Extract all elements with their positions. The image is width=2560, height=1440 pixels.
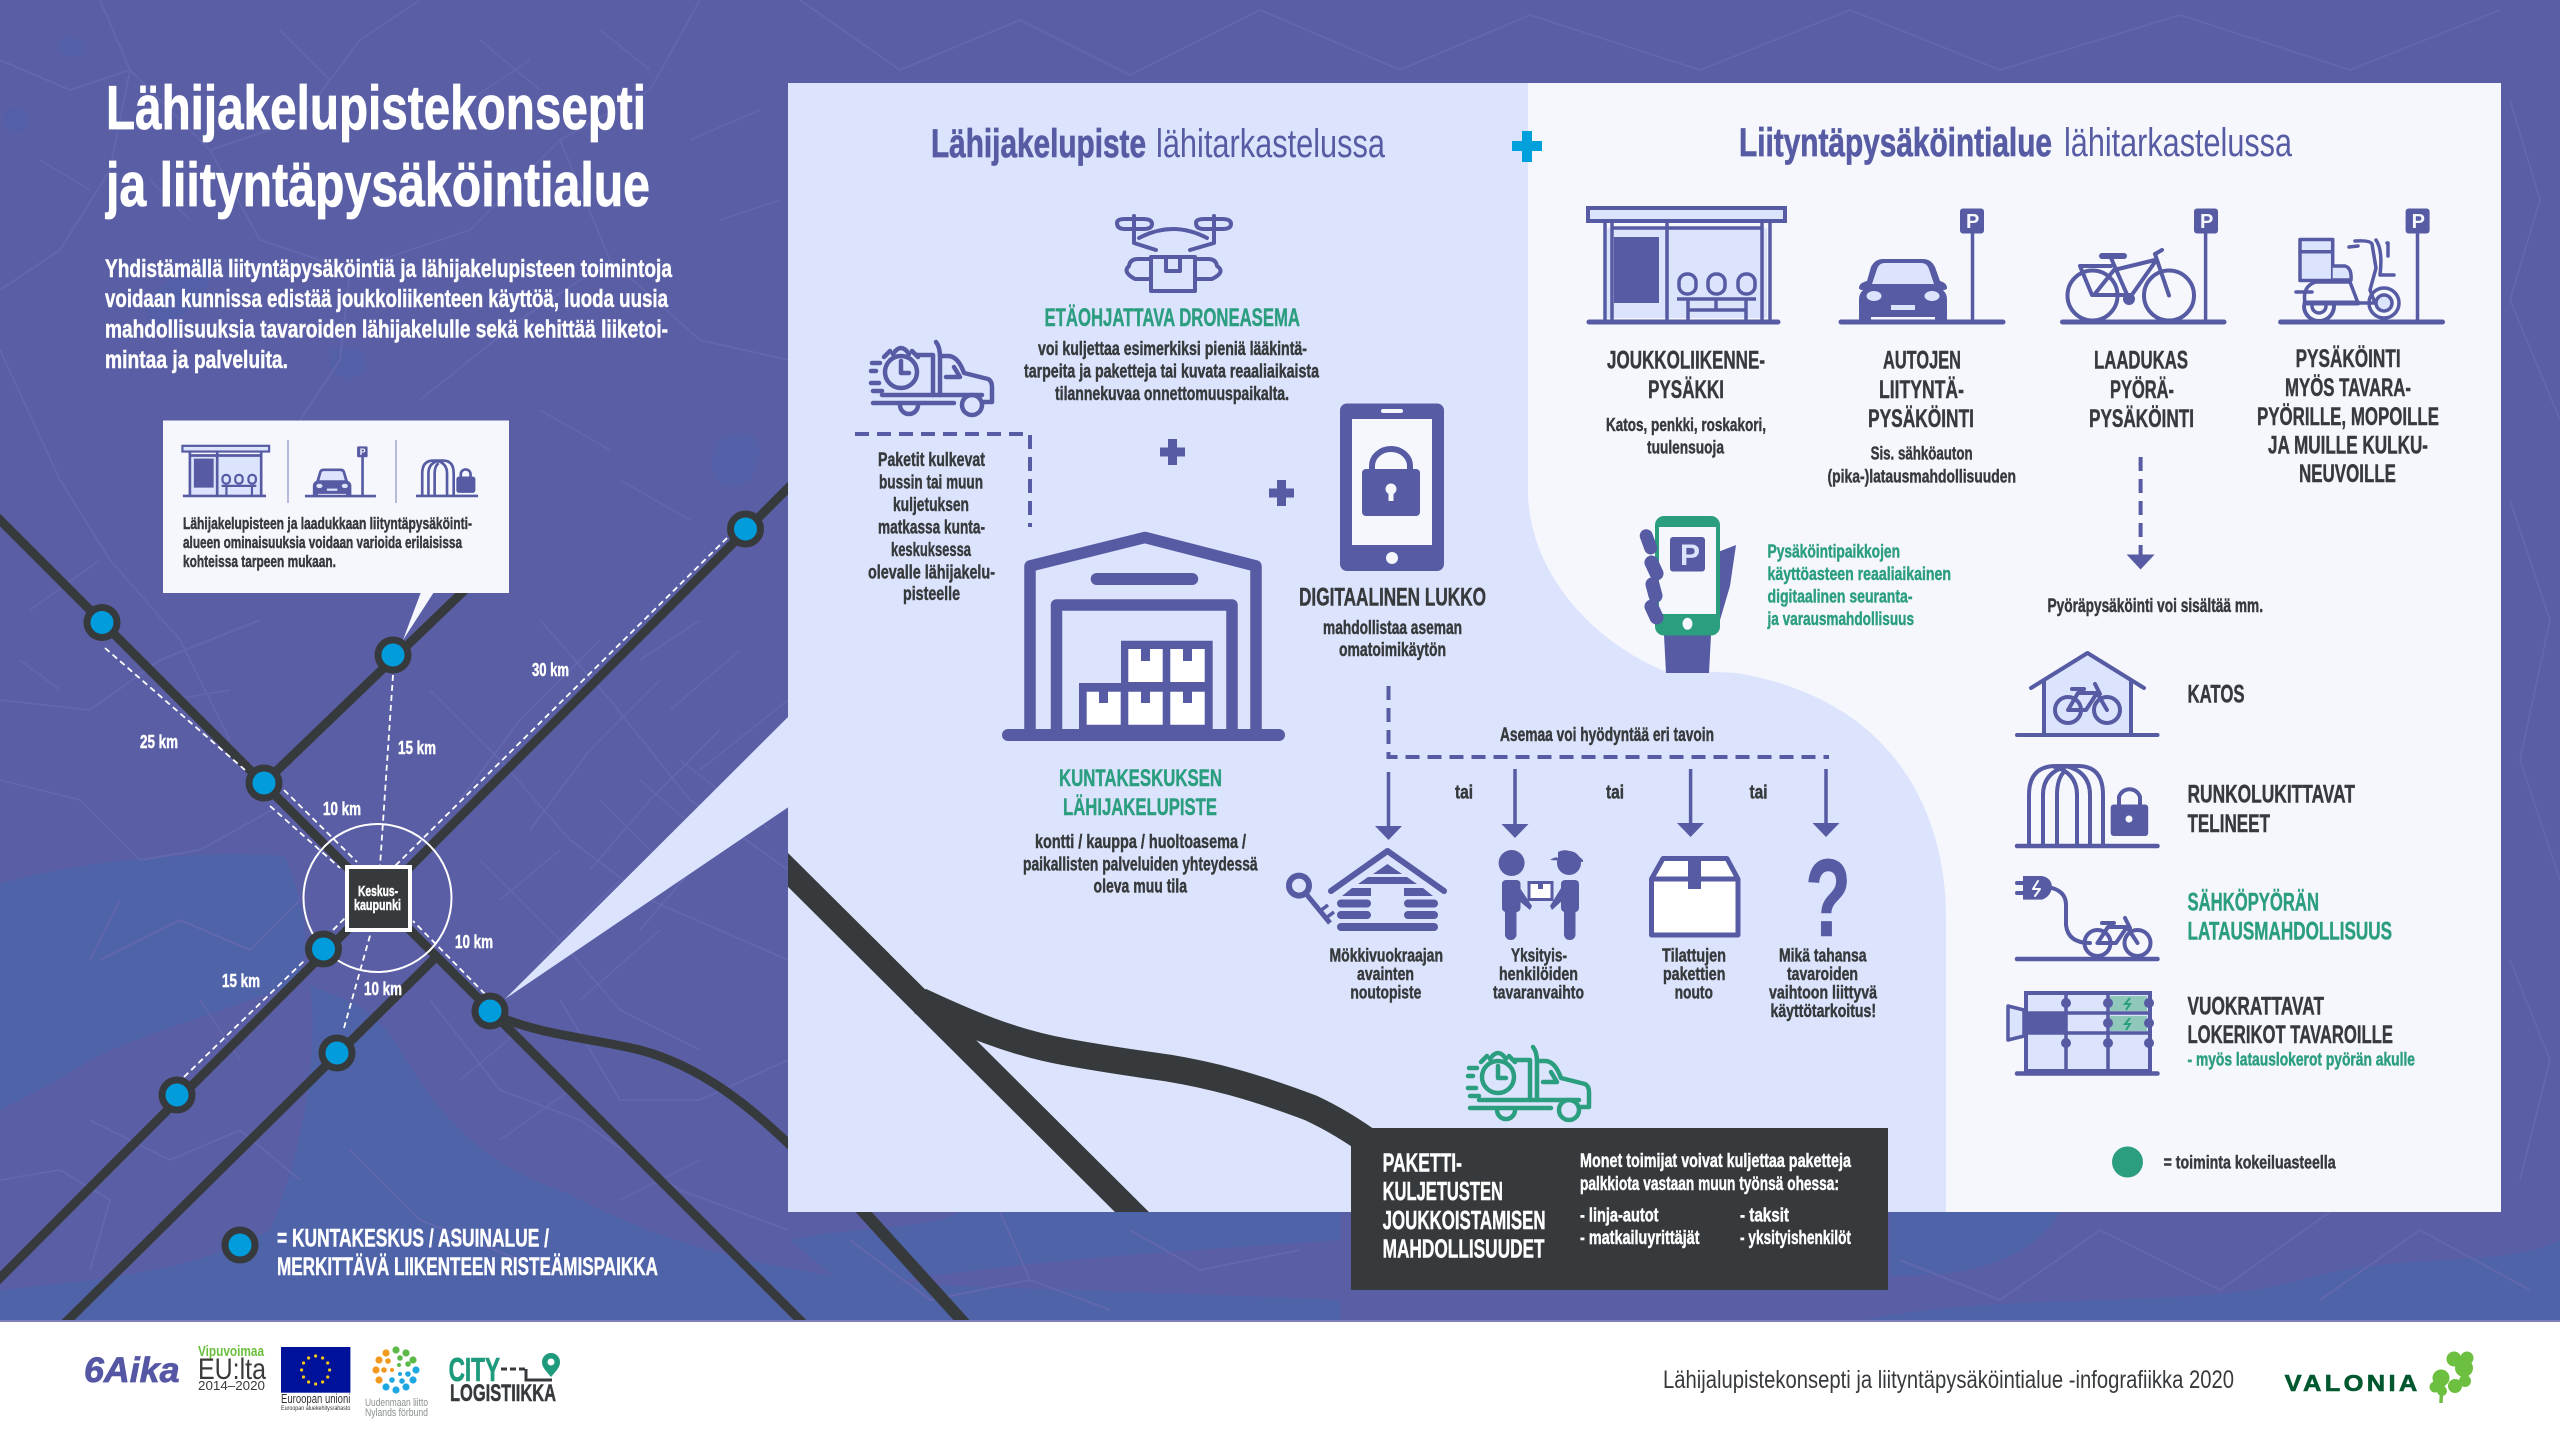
dark box: crowdsourced parcel delivery: - matkailuyrittäjät (1580, 1228, 1700, 1249)
logo: Valonia: VALONIA (2285, 1370, 2421, 1396)
sublabels: parking types (1606, 414, 2016, 486)
logo: Vipuvoimaa EU:lta (198, 1343, 266, 1393)
labels: parking types: PYÖRILLE, MOPOILLE (2257, 402, 2439, 431)
dashed arrow to bike parking options (2127, 457, 2155, 570)
parcel point text: paikallisten palveluiden yhteydessä (1023, 855, 1258, 876)
logo: Vipuvoimaa EU:lta: EU:lta (198, 1353, 266, 1386)
parcel point text: LÄHIJAKELUPISTE (1063, 794, 1217, 821)
icon: delivery truck (871, 342, 992, 415)
icon: drone (1117, 216, 1231, 291)
dashed branch for station uses (1388, 686, 1829, 757)
labels: parking types: PYSÄKÖINTI (2089, 404, 2194, 433)
drone station text: ETÄOHJATTAVA DRONEASEMA (1044, 304, 1300, 332)
distance labels: 10 km (323, 799, 361, 819)
plus between panels (1512, 131, 1542, 162)
distance labels: 15 km (398, 738, 436, 758)
icon: parcel box (1651, 858, 1738, 935)
heading: lähijakelupiste: lähitarkastelussa (1156, 122, 1386, 166)
icon: bicycle and parking sign: P (2200, 211, 2213, 233)
intro paragraph: Yhdistämällä liityntäpysäköintiä ja lähijakelupisteen toimintoja (105, 255, 673, 283)
use case labels: henkilöiden (1499, 963, 1578, 984)
arrows to use cases (1375, 769, 1840, 840)
distance labels: 10 km (455, 932, 493, 952)
callout text: alueen ominaisuuksia voidaan varioida erilaisissa (183, 534, 463, 552)
logo: 6Aika: 6Aika (84, 1351, 180, 1390)
dark box: crowdsourced parcel delivery: PAKETTI- (1383, 1150, 1462, 1178)
logo: Uudenmaan liitto (365, 1346, 428, 1419)
labels: bike parking options: SÄHKÖPYÖRÄN (2188, 888, 2319, 917)
parcel point text: kontti / kauppa / huoltoasema / (1035, 832, 1247, 853)
dashed route to parcel point (855, 434, 1030, 527)
sublabels: parking types: tuulensuoja (1647, 437, 1725, 458)
distance labels: 15 km (222, 971, 260, 991)
callout text (183, 515, 472, 571)
labels: parking types: PYÖRÄ- (2110, 375, 2174, 404)
logo: European Union (281, 1347, 351, 1412)
labels: parking types: NEUVOILLE (2299, 460, 2396, 488)
icon: bike frame lock rack (2017, 766, 2158, 846)
dark box: crowdsourced parcel delivery: KULJETUSTEN (1383, 1178, 1503, 1206)
logo: European Union: Euroopan unioni (281, 1391, 350, 1406)
icon: car and parking sign (1841, 208, 2003, 322)
dark box: crowdsourced parcel delivery (1351, 1128, 1888, 1290)
dark box: crowdsourced parcel delivery: palkkiota vastaan muun työnsä ohessa: (1580, 1174, 1839, 1195)
labels: parking types: AUTOJEN (1883, 347, 1961, 375)
logo: Vipuvoimaa EU:lta: 2014–2020 (198, 1379, 265, 1393)
drone station text (1024, 304, 1319, 405)
title (105, 74, 650, 220)
heading: liityntäpysäköintialue: Liityntäpysäköintialue (1739, 121, 2052, 165)
thick road in detail panel (788, 853, 1372, 1212)
icon: small shelter (182, 446, 269, 496)
callout text: kohteissa tarpeen mukaan. (183, 553, 336, 571)
dark box: crowdsourced parcel delivery: JOUKKOISTAMISEN (1383, 1207, 1546, 1235)
parcel point text (1023, 765, 1258, 898)
dark box: crowdsourced parcel delivery: - taksit (1740, 1206, 1790, 1227)
parcel point text: oleva muu tila (1094, 877, 1187, 898)
drone station text: tarpeita ja paketteja tai kuvata reaaliaikaista (1024, 362, 1319, 382)
parcel point text: KUNTAKESKUKSEN (1059, 765, 1222, 792)
use case labels: tavaroiden (1787, 963, 1858, 984)
icon: two people exchanging a parcel (1499, 850, 1583, 940)
digital lock text: omatoimikäytön (1339, 640, 1446, 661)
icon: bus shelter (1588, 208, 1785, 322)
text: parcels travel on bus: matkassa kunta- (878, 517, 985, 539)
icon: smartphone lock (1340, 404, 1444, 571)
logo: Vipuvoimaa EU:lta: Vipuvoimaa (198, 1343, 265, 1360)
legend: pilot activity: = toiminta kokeiluasteella (2164, 1153, 2336, 1173)
centre city box (347, 867, 410, 930)
route network map with distance labels (0, 476, 966, 1330)
text: real time parking monitoring: Pysäköintipaikkojen (1768, 541, 1900, 562)
icon: green delivery truck (1468, 1047, 1589, 1120)
labels: bike parking options: LATAUSMAHDOLLISUUS (2188, 918, 2392, 946)
labels: bike parking options: - myös latauslokerot pyörän akulle (2188, 1050, 2415, 1070)
icon: bicycle and parking sign (2062, 208, 2224, 322)
icon: cabin and key (1289, 851, 1444, 931)
labels: parking types: JOUKKOLIIKENNE- (1607, 347, 1765, 375)
footer caption: Lähijalupistekonsepti ja liityntäpysäköintialue -infografiikka 2020 (1663, 1366, 2234, 1394)
tai labels: tai (1455, 783, 1473, 804)
icon: small car with parking sign: P (360, 447, 366, 457)
text: real time parking monitoring: ja varausmahdollisuus (1767, 608, 1914, 629)
text: parcels travel on bus: pisteelle (903, 583, 960, 605)
distance labels: 25 km (140, 732, 178, 752)
logo: City-logistiikka: LOGISTIIKKA (450, 1380, 556, 1407)
digital lock text: mahdollistaa aseman (1323, 618, 1462, 639)
dark box: crowdsourced parcel delivery: - yksityishenkilöt (1740, 1228, 1851, 1249)
labels: bike parking options: RUNKOLUKITTAVAT (2188, 780, 2355, 808)
use case labels: vaihtoon liittyvä (1769, 982, 1878, 1003)
logo: Uudenmaan liitto: Uudenmaan liitto (365, 1397, 428, 1409)
centre city box: Keskus- (358, 884, 398, 900)
text: real time parking monitoring: käyttöasteen reaaliaikainen (1768, 563, 1951, 584)
drone station text: tilannekuvaa onnettomuuspaikalta. (1055, 384, 1289, 405)
text: parcels travel on bus: olevalle lähijakelu- (868, 562, 995, 584)
legend: node meaning (225, 1224, 658, 1281)
icon: scooter and parking sign (2281, 208, 2442, 322)
panel: lähijakelupiste detail (770, 83, 1988, 1225)
sublabels: parking types: Katos, penkki, roskakori, (1606, 414, 1766, 435)
labels: parking types: PYSÄKÖINTI (1868, 404, 1974, 433)
legend: node meaning: = KUNTAKESKUS / ASUINALUE / (277, 1224, 549, 1252)
plus sign (1160, 439, 1185, 465)
15 km radius circle (304, 824, 452, 972)
labels: bike parking options: KATOS (2188, 680, 2244, 708)
text: bike parking may include: Pyöräpysäköinti voi sisältää mm. (2048, 596, 2263, 617)
labels: parking types: JA MUILLE KULKU- (2268, 432, 2428, 460)
labels: parking types: PYSÄKKI (1648, 376, 1724, 404)
callout box: site features (163, 420, 509, 640)
distance labels: 10 km (364, 979, 402, 999)
use case labels (1330, 944, 1878, 1021)
use case labels: Tilattujen (1662, 944, 1726, 966)
icon: small bike rack with lock (416, 461, 478, 496)
use case labels: avainten (1357, 963, 1414, 984)
icon: ebike charging (2017, 876, 2158, 959)
logo: Uudenmaan liitto: Nylands förbund (365, 1407, 428, 1419)
icon: scooter and parking sign: P (2412, 211, 2425, 233)
labels: parking types: LIITYNTÄ- (1879, 376, 1964, 404)
title: Lähijakelupistekonsepti (106, 74, 646, 143)
digital lock text (1299, 584, 1486, 661)
dark box: crowdsourced parcel delivery: - linja-autot (1580, 1206, 1659, 1227)
labels: parking types: LAADUKAS (2094, 347, 2188, 375)
text: real time parking monitoring: digitaalinen seuranta- (1768, 586, 1912, 607)
intro paragraph: mahdollisuuksia tavaroiden lähijakelulle sekä kehittää liiketoi- (105, 316, 668, 344)
node markers (87, 514, 760, 1110)
sublabels: parking types: (pika-)latausmahdollisuuden (1828, 466, 2016, 486)
centre city box: kaupunki (354, 898, 401, 914)
heading: liityntäpysäköintialue: lähitarkastelussa (2064, 121, 2293, 165)
labels: parking types: PYSÄKÖINTI (2296, 344, 2401, 373)
icon: small car with parking sign (305, 446, 376, 496)
icon: warehouse (1002, 538, 1285, 741)
use case labels: nouto (1675, 982, 1713, 1003)
footer (0, 1320, 2560, 1440)
labels: parking types: MYÖS TAVARA- (2285, 373, 2411, 402)
labels: parking types (1607, 344, 2439, 488)
tai labels: tai (1750, 783, 1768, 804)
labels: bike parking options (2188, 680, 2415, 1070)
panel: liityntäpysäköinti detail (1528, 83, 2501, 1212)
logo: City-logistiikka (449, 1351, 560, 1407)
text: parcels travel on bus: keskuksessa (891, 539, 971, 561)
title: ja liityntäpysäköintialue (105, 151, 650, 220)
legend: node meaning: MERKITTÄVÄ LIIKENTEEN RISTEÄMISPAIKKA (277, 1253, 658, 1281)
digital lock text: DIGITAALINEN LUKKO (1299, 584, 1486, 612)
text: parcels travel on bus (868, 449, 995, 605)
distance dashed lines (105, 538, 727, 1077)
legend: pilot activity (2112, 1146, 2336, 1178)
icon: question mark: ? (1805, 837, 1851, 960)
text: parcels travel on bus: kuljetuksen (893, 494, 969, 516)
labels: bike parking options: VUOKRATTAVAT (2188, 993, 2324, 1021)
logo: Valonia (2285, 1352, 2474, 1403)
logo: European Union: Euroopan aluekehitysrahasto (281, 1406, 351, 1412)
drone station text: voi kuljettaa esimerkiksi pieniä lääkintä- (1038, 339, 1307, 360)
labels: bike parking options: LOKERIKOT TAVAROILLE (2188, 1021, 2393, 1049)
use case labels: noutopiste (1350, 982, 1421, 1003)
heading: lähijakelupiste (931, 122, 1386, 166)
intro paragraph (105, 255, 673, 374)
logo: City-logistiikka: CITY (449, 1351, 500, 1388)
text: station uses heading: Asemaa voi hyödyntää eri tavoin (1500, 725, 1714, 746)
tai labels (1455, 783, 1768, 804)
use case labels: tavaranvaihto (1493, 982, 1584, 1003)
use case labels: Mökkivuokraajan (1330, 944, 1443, 966)
text: parcels travel on bus: Paketit kulkevat (878, 449, 985, 471)
callout pointer to detail panel (505, 715, 790, 999)
tai labels: tai (1606, 783, 1624, 804)
sublabels: parking types: Sis. sähköauton (1871, 443, 1973, 464)
heading: lähijakelupiste: Lähijakelupiste (931, 122, 1146, 166)
use case labels: pakettien (1663, 963, 1725, 984)
icon: hand holding parking app phone (1638, 516, 1736, 673)
labels: bike parking options: TELINEET (2188, 810, 2270, 838)
dark box: crowdsourced parcel delivery: Monet toimijat voivat kuljettaa paketteja (1580, 1151, 1851, 1172)
text: real time parking monitoring (1767, 541, 1951, 629)
icon: rental lockers (2008, 993, 2158, 1074)
callout text: Lähijakelupisteen ja laadukkaan liityntäpysäköinti- (183, 515, 472, 533)
text: parcels travel on bus: bussin tai muun (879, 472, 983, 494)
distance labels (140, 660, 569, 999)
icon: car and parking sign: P (1966, 211, 1979, 233)
road lines (0, 476, 966, 1330)
icon: bike shelter (2017, 653, 2158, 735)
use case labels: Yksityis- (1511, 944, 1567, 966)
intro paragraph: mintaa ja palveluita. (105, 346, 288, 374)
use case labels: käyttötarkoitus! (1770, 1000, 1876, 1021)
intro paragraph: voidaan kunnissa edistää joukkoliikenteen käyttöä, luoda uusia (105, 285, 669, 313)
dark box: crowdsourced parcel delivery: MAHDOLLISUUDET (1383, 1236, 1545, 1264)
icon: hand holding parking app phone: P (1680, 539, 1700, 572)
use case labels: Mikä tahansa (1779, 944, 1867, 966)
plus sign (1269, 480, 1294, 506)
distance labels: 30 km (532, 660, 569, 680)
